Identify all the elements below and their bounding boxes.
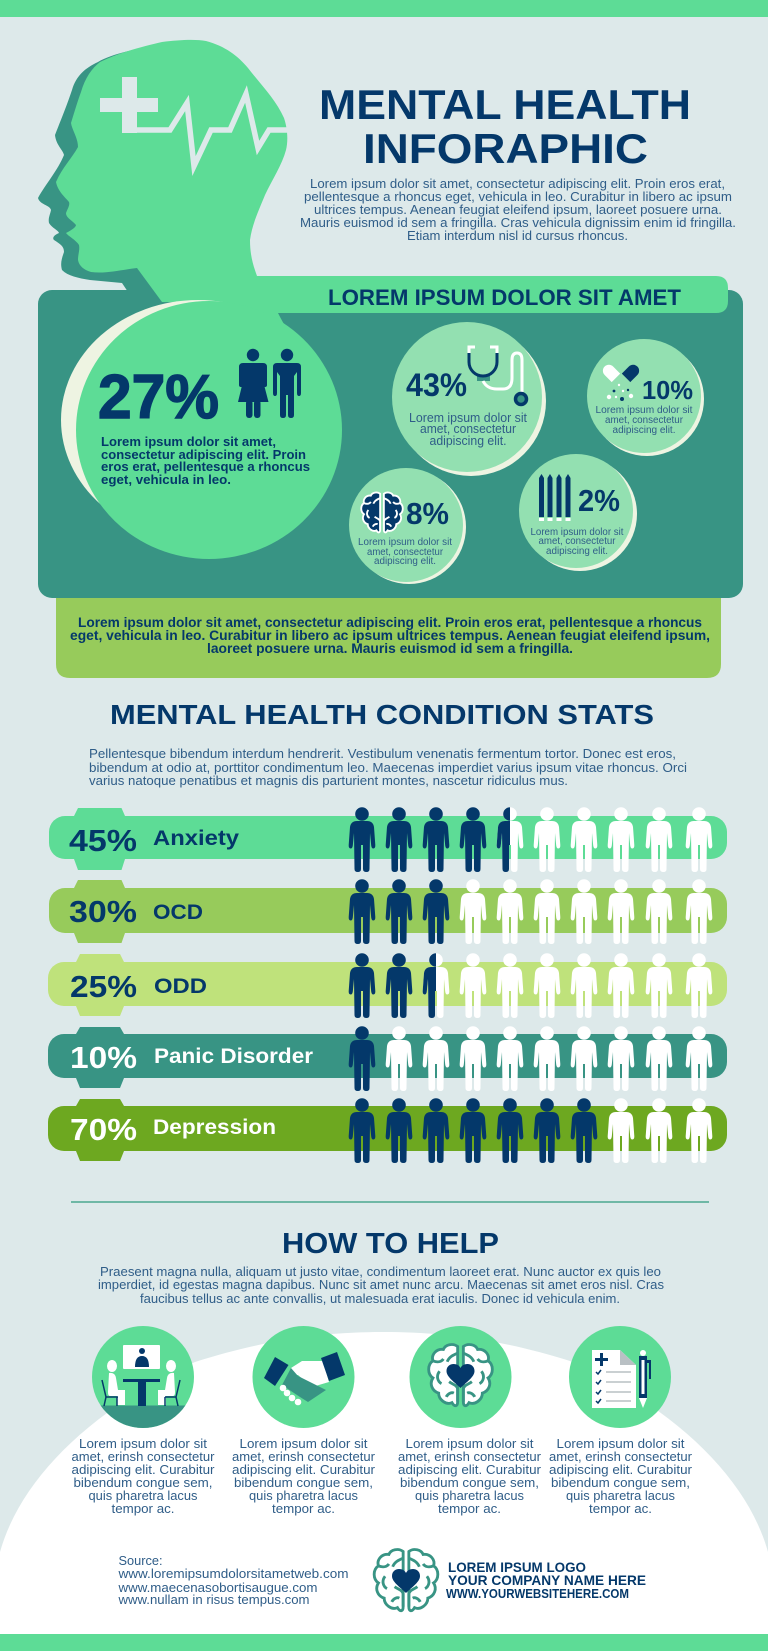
head silhouette with banner xyxy=(56,40,728,430)
icon: woman and man xyxy=(238,349,301,418)
sources: www.nullam in risus tempus.com xyxy=(117,1592,310,1607)
panel: 2% circle: adipiscing elit. xyxy=(546,546,608,557)
big circle text: eget, vehicula in leo. xyxy=(101,473,231,487)
panel: 2% circle: 2% xyxy=(578,483,620,518)
big circle text xyxy=(101,435,310,487)
intro text block: pellentesque a rhoncus eget, vehicula in leo. Curabitur in libero ac ipsum xyxy=(304,189,732,204)
panel: 43% circle: Lorem ipsum dolor sit xyxy=(409,411,528,425)
panel: 2% circle xyxy=(519,454,637,571)
help column 3 text: quis pharetra lacus xyxy=(415,1488,524,1503)
panel: 2% circle: amet, consectetur xyxy=(538,536,616,547)
help column 2 text xyxy=(232,1436,376,1516)
intro text block xyxy=(300,176,736,243)
panel: 8% circle xyxy=(349,468,466,584)
logo text xyxy=(446,1559,646,1601)
icon: therapy session xyxy=(91,1326,195,1430)
big circle crescent xyxy=(61,300,335,540)
icon: handshake xyxy=(252,1326,354,1428)
panel: 10% circle: 10% xyxy=(642,375,693,405)
logo text: WWW.YOURWEBSITEHERE.COM xyxy=(446,1587,629,1601)
help column 3 text: tempor ac. xyxy=(438,1501,501,1516)
row: anxiety: Anxiety xyxy=(153,827,239,850)
row: panic disorder: Panic Disorder xyxy=(154,1045,313,1068)
title: INFORAPHIC xyxy=(363,125,648,172)
help column 2 text: tempor ac. xyxy=(272,1501,335,1516)
stats intro text: Pellentesque bibendum interdum hendrerit. Vestibulum venenatis fermentum tortor. Donec est eros, xyxy=(89,746,676,761)
big circle text: consectetur adipiscing elit. Proin xyxy=(101,448,306,462)
panel: 10% circle: amet, consectetur xyxy=(605,415,684,426)
help column 1 text: bibendum congue sem, xyxy=(74,1475,212,1490)
row: panic disorder xyxy=(48,1026,727,1091)
help column 1 text xyxy=(72,1436,215,1516)
row: OCD: OCD xyxy=(153,901,203,924)
panel: green summary xyxy=(56,598,721,678)
stat: 27%: 27% xyxy=(98,363,219,432)
panel: main teal background xyxy=(38,290,743,598)
help column 3 text: amet, erinsh consectetur xyxy=(398,1449,542,1464)
big circle text: Lorem ipsum dolor sit amet, xyxy=(101,435,276,449)
intro text block: Mauris euismod id sem a fringilla. Cras vehicula dignissim enim id fringilla. xyxy=(300,215,736,230)
title xyxy=(319,81,691,172)
help column 1 text: adipiscing elit. Curabitur xyxy=(72,1462,215,1477)
summary text: eget, vehicula in leo. Curabitur in libero ac ipsum ultrices tempus. Aenean feugiat eleifend ipsum, xyxy=(70,628,710,643)
help column 1 text: quis pharetra lacus xyxy=(88,1488,198,1503)
panel: 43% circle xyxy=(392,322,546,476)
icon: pencils xyxy=(539,474,570,521)
icon: medical cross and heartbeat xyxy=(100,77,287,166)
help column 1 text: Lorem ipsum dolor sit xyxy=(79,1436,207,1451)
help intro text: imperdiet, id egestas magna dapibus. Nunc sit amet nunc arcu. Maecenas sit amet eros nisl. Cras xyxy=(98,1277,664,1292)
panel: 10% circle xyxy=(587,339,704,456)
panel: 10% circle: Lorem ipsum dolor sit xyxy=(596,405,693,416)
sources: www.maecenasobortisaugue.com xyxy=(117,1580,318,1595)
logo text: LOREM IPSUM LOGO xyxy=(448,1559,586,1575)
icon: stethoscope xyxy=(469,347,526,404)
big circle text: eros erat, pellentesque a rhoncus xyxy=(101,460,310,474)
heading: condition stats: MENTAL HEALTH CONDITION STATS xyxy=(110,699,654,730)
heading: how to help: HOW TO HELP xyxy=(282,1228,499,1260)
white hill background xyxy=(0,1332,768,1634)
help column 4 text: quis pharetra lacus xyxy=(566,1488,675,1503)
row: depression xyxy=(48,1098,727,1163)
row: depression: Depression xyxy=(153,1116,276,1139)
help column 1 text: amet, erinsh consectetur xyxy=(72,1449,215,1464)
row: depression: 70% xyxy=(70,1112,137,1147)
panel: 10% circle: adipiscing elit. xyxy=(612,425,676,436)
help column 2 text: Lorem ipsum dolor sit xyxy=(240,1436,368,1451)
sources: www.loremipsumdolorsitametweb.com xyxy=(117,1566,348,1581)
row: anxiety: 45% xyxy=(69,823,137,858)
stats intro text: bibendum at odio at, porttitor condimentum leo. Maecenas imperdiet varius ipsum vitae rhoncus. Orci xyxy=(89,760,687,775)
help column 2 text: adipiscing elit. Curabitur xyxy=(232,1462,376,1477)
panel: 43% circle: amet, consectetur xyxy=(420,422,516,436)
help intro text: faucibus tellus ac ante convallis, ut malesuada erat iaculis. Donec id vehicula enim. xyxy=(140,1291,620,1306)
row: panic disorder: 10% xyxy=(70,1040,137,1075)
panel: 43% circle: 43% xyxy=(406,367,467,403)
row: anxiety xyxy=(49,807,727,872)
panel: 2% circle: Lorem ipsum dolor sit xyxy=(530,527,624,538)
stats intro text: varius natoque penatibus et magnis dis parturient montes, nascetur ridiculus mus. xyxy=(89,773,568,788)
help column 4 text: tempor ac. xyxy=(589,1501,652,1516)
summary text xyxy=(70,615,710,656)
help column 1 text: tempor ac. xyxy=(112,1501,174,1516)
help column 4 text: bibendum congue sem, xyxy=(551,1475,690,1490)
title: MENTAL HEALTH xyxy=(319,81,691,128)
icon: brain xyxy=(361,492,403,532)
help column 4 text xyxy=(549,1436,693,1516)
intro text block: Lorem ipsum dolor sit amet, consectetur adipiscing elit. Proin eros erat, xyxy=(310,176,725,191)
help column 3 text: adipiscing elit. Curabitur xyxy=(398,1462,542,1477)
help intro text: Praesent magna nulla, aliquam ut justo vitae, condimentum laoreet erat. Nunc auctor ex quis leo xyxy=(100,1264,661,1279)
row: ODD: 25% xyxy=(70,969,137,1004)
panel: 43% circle: adipiscing elit. xyxy=(430,434,506,448)
help column 3 text: bibendum congue sem, xyxy=(400,1475,539,1490)
help column 2 text: quis pharetra lacus xyxy=(249,1488,358,1503)
help column 4 text: Lorem ipsum dolor sit xyxy=(556,1436,685,1451)
panel: 8% circle: adipiscing elit. xyxy=(374,556,436,567)
sources: Source: xyxy=(118,1553,162,1568)
help column 2 text: amet, erinsh consectetur xyxy=(232,1449,376,1464)
panel: 8% circle: Lorem ipsum dolor sit xyxy=(358,537,452,548)
summary text: laoreet posuere urna. Mauris euismod id sem a fringilla. xyxy=(207,641,573,656)
logo: brain with heart xyxy=(374,1550,438,1611)
intro text block: Etiam interdum nisl id cursus rhoncus. xyxy=(407,228,628,243)
row: OCD xyxy=(49,879,727,944)
logo text: YOUR COMPANY NAME HERE xyxy=(448,1572,646,1588)
help column 2 text: bibendum congue sem, xyxy=(234,1475,373,1490)
row: ODD: ODD xyxy=(154,975,207,998)
head silhouette shadow xyxy=(38,44,170,292)
help column 3 text: Lorem ipsum dolor sit xyxy=(406,1436,534,1451)
stats intro text xyxy=(89,746,687,788)
icon: pills xyxy=(600,362,642,401)
icon: clipboard and pen xyxy=(569,1326,671,1428)
help column 3 text xyxy=(398,1436,542,1516)
help column 4 text: adipiscing elit. Curabitur xyxy=(549,1462,693,1477)
big circle xyxy=(76,301,342,559)
help column 4 text: amet, erinsh consectetur xyxy=(549,1449,693,1464)
bottom bar xyxy=(0,1634,768,1651)
panel: 8% circle: 8% xyxy=(406,496,449,531)
row: ODD xyxy=(48,953,727,1018)
intro text block: ultrices tempus. Aenean feugiat eleifend ipsum, laoreet posuere urna. xyxy=(314,202,722,217)
sources xyxy=(117,1553,348,1607)
top bar xyxy=(0,0,768,17)
icon: brain with heart xyxy=(410,1326,512,1428)
panel: 8% circle: amet, consectetur xyxy=(367,547,444,558)
row: OCD: 30% xyxy=(69,894,137,929)
summary text: Lorem ipsum dolor sit amet, consectetur adipiscing elit. Proin eros erat, pellentesque a rhoncus xyxy=(78,615,702,630)
help intro text xyxy=(98,1264,664,1306)
banner heading: LOREM IPSUM DOLOR SIT AMET xyxy=(328,285,682,310)
